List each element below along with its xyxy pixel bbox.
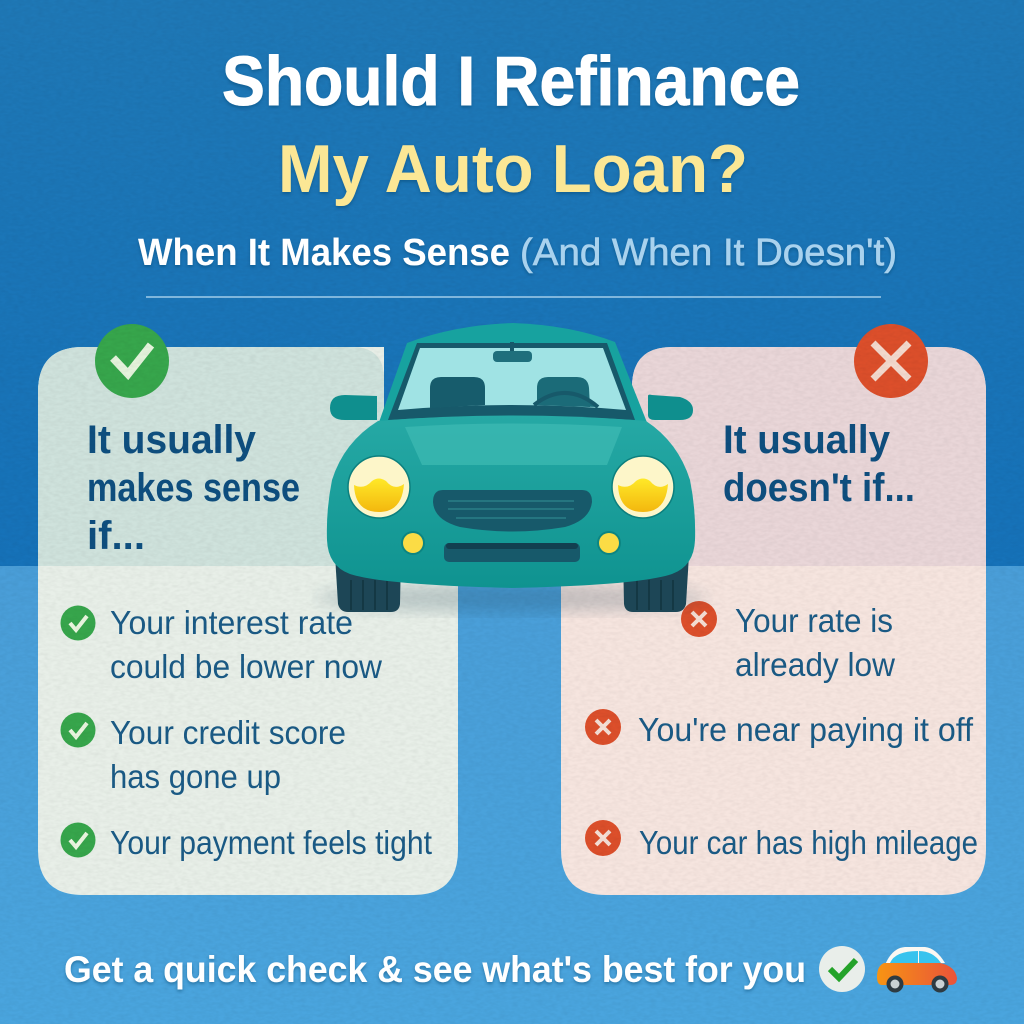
- panel: it usually does not: [561, 324, 986, 895]
- item: interest rate: could be lower now: [110, 648, 382, 685]
- headlights: [348, 456, 674, 518]
- title: My Auto Loan?: [278, 131, 748, 207]
- panel: it usually makes sense: [38, 324, 458, 895]
- car shadow: [317, 584, 707, 612]
- item: credit score: [60, 712, 346, 795]
- item: interest rate: Your interest rate: [110, 604, 353, 641]
- title: Should I Refinance: [222, 42, 800, 120]
- item: near paying it off: You're near paying it off: [638, 711, 974, 748]
- body: [327, 416, 695, 588]
- icon: mini orange car: [877, 947, 957, 992]
- subtitle: When It Makes Sense: [138, 232, 510, 274]
- roof: [378, 323, 648, 425]
- bumper slot: [444, 543, 580, 562]
- item: rate already low: already low: [735, 646, 895, 683]
- item: rate already low: [681, 601, 895, 683]
- illustration: teal car: [327, 323, 695, 612]
- heading: it usually makes sense if: if...: [87, 514, 145, 558]
- icon: large green check: [95, 324, 169, 398]
- footer call to action: Get a quick check & see what's best for you: [64, 949, 806, 990]
- mirrors: [330, 395, 693, 420]
- heading: it usually does not if: doesn't if...: [723, 466, 915, 510]
- heading: it usually makes sense if: It usually: [87, 418, 257, 462]
- item: interest rate: [60, 604, 382, 685]
- item: credit score: has gone up: [110, 758, 281, 795]
- icon: footer check: [819, 946, 865, 992]
- item: payment feels tight: Your payment feels tight: [110, 824, 432, 861]
- item: high mileage: Your car has high mileage: [639, 824, 978, 861]
- item: credit score: Your credit score: [110, 714, 346, 751]
- item: rate already low: Your rate is: [735, 602, 893, 639]
- fog lights: [401, 531, 621, 555]
- heading: it usually makes sense if: makes sense: [87, 466, 300, 510]
- hood highlight: [405, 424, 622, 465]
- title: [222, 42, 800, 207]
- subtitle: [138, 232, 897, 274]
- subtitle: (And When It Doesn't): [520, 232, 897, 274]
- tires: [335, 555, 689, 612]
- heading: it usually does not if: It usually: [723, 418, 891, 462]
- windshield: [388, 342, 635, 420]
- icon: large red cross: [854, 324, 928, 398]
- grille: [433, 490, 592, 532]
